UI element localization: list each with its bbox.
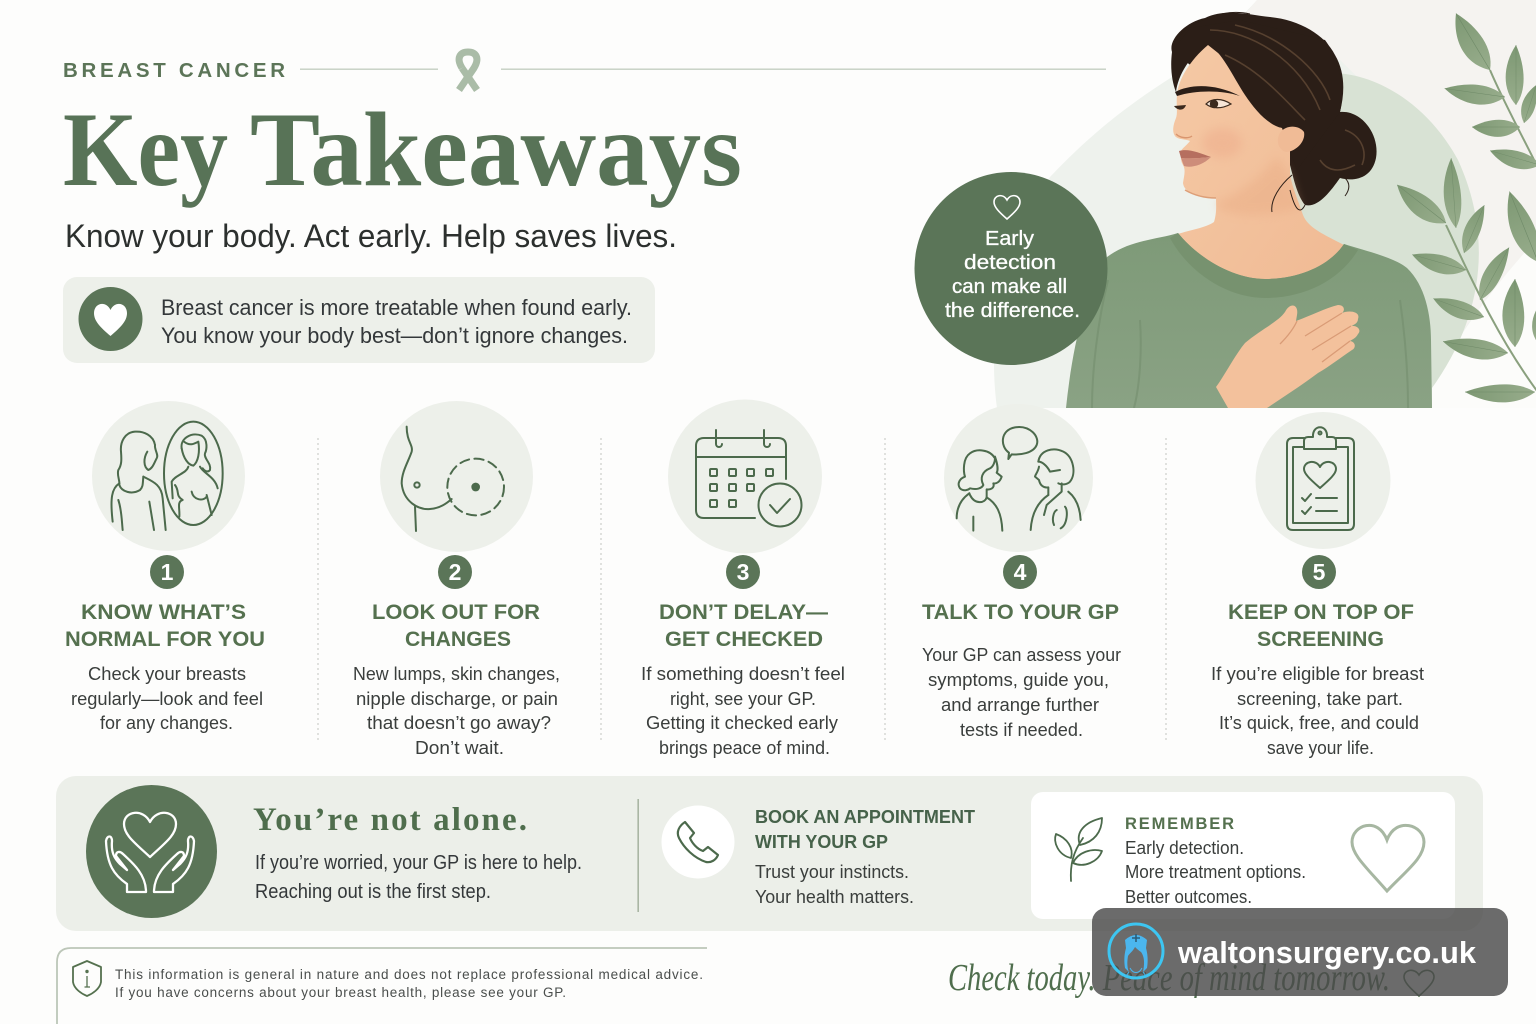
step 3: don't delay, get checked: [641, 400, 845, 758]
callout: treatable when found early: Breast cancer is more treatable when found early.: [161, 295, 632, 320]
number 2: [438, 555, 472, 589]
badge: early detection: detection: [964, 251, 1056, 274]
hair front: [1171, 40, 1342, 130]
disclaimer: If you have concerns about your breast health, please see your GP.: [115, 985, 566, 1000]
step 1: know what's normal for you: [65, 401, 265, 733]
woman: [1066, 12, 1432, 408]
step 4: talk to your GP: and arrange further: [941, 694, 1099, 715]
number 5: 5: [1313, 559, 1326, 585]
badge: early detection: Early: [985, 227, 1035, 250]
callout: treatable when found early: You know your body best—don’t ignore changes.: [161, 323, 628, 348]
number 1: [150, 555, 184, 589]
step 3: don't delay, get checked: If something doesn’t feel: [641, 663, 845, 684]
facial features: [1175, 86, 1240, 96]
number 1: 1: [161, 559, 174, 585]
bottom support panel: Reaching out is the first step.: [255, 881, 491, 903]
step 4: talk to your GP: tests if needed.: [960, 719, 1083, 740]
step 2: look out for changes: [353, 401, 560, 758]
remember card: Early detection.: [1125, 837, 1244, 858]
step 5: keep on top of screening: [1211, 412, 1424, 758]
icon: patient and doctor talking: [944, 404, 1093, 552]
icon: woman looking in mirror: [92, 401, 245, 551]
bottom support panel: If you’re worried, your GP is here to help.: [255, 852, 582, 874]
hair back and bun: [1171, 13, 1377, 205]
icon: info shield: [73, 961, 101, 996]
disclaimer: [57, 948, 707, 1024]
icon: awareness ribbon: [459, 52, 477, 90]
step 2: look out for changes: Don’t wait.: [415, 737, 504, 758]
bottom support panel: [56, 776, 1483, 931]
closing script line: Check today. Peace of mind tomorrow.: [948, 957, 1390, 999]
badge: early detection: can make all: [952, 275, 1067, 298]
bottom support panel: BOOK AN APPOINTMENT: [755, 806, 976, 827]
icon: hands holding heart: [86, 785, 217, 918]
step 1: know what's normal for you: KNOW WHAT’S: [81, 600, 246, 624]
leaves: upper branch: [1443, 8, 1536, 175]
callout: treatable when found early: [63, 277, 655, 363]
ear: [1282, 126, 1304, 152]
number 2: 2: [449, 559, 461, 585]
number 4: 4: [1014, 559, 1027, 585]
disclaimer: This information is general in nature and does not replace professional medical advice.: [115, 967, 703, 982]
step 2: look out for changes: New lumps, skin changes,: [353, 663, 560, 684]
icon: phone: [662, 806, 734, 878]
hero illustration: woman with hand on chest and leaves: [994, 0, 1536, 408]
remember card: More treatment options.: [1125, 861, 1306, 882]
icon: breast with dashed circle: [380, 401, 533, 552]
bottom support panel: Your health matters.: [755, 886, 914, 907]
step 5: keep on top of screening: If you’re eligible for breast: [1211, 663, 1424, 684]
icon: calendar with check: [668, 400, 822, 554]
bottom support panel: Trust your instincts.: [755, 861, 909, 882]
remember card: [1031, 792, 1455, 919]
remember card: REMEMBER: [1125, 815, 1234, 833]
number 3: 3: [737, 559, 749, 585]
bottom support panel: WITH YOUR GP: [755, 831, 888, 852]
title: Takeaways: [250, 91, 742, 208]
step 4: talk to your GP: symptoms, guide you,: [928, 669, 1109, 690]
watermark: waltonsurgery.co.uk: waltonsurgery.co.uk: [1177, 936, 1476, 970]
step 5: keep on top of screening: SCREENING: [1257, 627, 1384, 651]
step 2: look out for changes: CHANGES: [405, 627, 511, 651]
tagline: Know your body. Act early. Help saves lives.: [65, 218, 677, 254]
step 5: keep on top of screening: KEEP ON TOP OF: [1228, 600, 1414, 624]
step 3: don't delay, get checked: Getting it checked early: [646, 712, 839, 733]
badge: early detection: [914, 172, 1108, 365]
icon: nurse logo: [1109, 924, 1163, 978]
remember card: Better outcomes.: [1125, 886, 1252, 907]
step 3: don't delay, get checked: GET CHECKED: [665, 627, 823, 651]
leaves: lower branch: [1390, 158, 1536, 402]
step 4: talk to your GP: [922, 404, 1121, 740]
step 4: talk to your GP: Your GP can assess your: [922, 644, 1121, 665]
number 5: [1302, 555, 1336, 589]
step 5: keep on top of screening: save your life.: [1267, 737, 1374, 758]
bottom support panel: You’re not alone.: [253, 802, 527, 838]
step 3: don't delay, get checked: right, see your GP.: [670, 688, 816, 709]
step 1: know what's normal for you: regularly—look and feel: [71, 688, 263, 709]
step 1: know what's normal for you: for any changes.: [100, 712, 233, 733]
icon: sprig: [1055, 818, 1102, 881]
header rule right: [501, 68, 1106, 70]
header rule left: [300, 68, 438, 70]
step 1: know what's normal for you: NORMAL FOR YOU: [65, 627, 265, 651]
title: Key: [63, 91, 228, 208]
watermark: waltonsurgery.co.uk: [1092, 908, 1508, 996]
icon: large heart outline: [1352, 825, 1424, 891]
step 3: don't delay, get checked: DON’T DELAY—: [659, 600, 829, 624]
step 2: look out for changes: nipple discharge, or pain: [356, 688, 558, 709]
step 3: don't delay, get checked: brings peace of mind.: [659, 737, 830, 758]
sweater: [1066, 233, 1432, 408]
number 3: [726, 555, 760, 589]
badge: early detection: the difference.: [945, 299, 1080, 322]
step 1: know what's normal for you: Check your breasts: [88, 663, 246, 684]
column dividers: [318, 438, 1166, 742]
step 2: look out for changes: that doesn’t go away?: [367, 712, 551, 733]
hand: [1216, 305, 1359, 408]
step 5: keep on top of screening: screening, take part.: [1237, 688, 1403, 709]
step 2: look out for changes: LOOK OUT FOR: [372, 600, 540, 624]
top label: breast cancer: BREAST CANCER: [63, 59, 285, 82]
number 4: [1003, 555, 1037, 589]
step 4: talk to your GP: TALK TO YOUR GP: [922, 600, 1119, 624]
step 5: keep on top of screening: It’s quick, free, and could: [1219, 712, 1419, 733]
icon: heart badge: [78, 287, 142, 351]
icon: clipboard with heart: [1256, 412, 1390, 549]
